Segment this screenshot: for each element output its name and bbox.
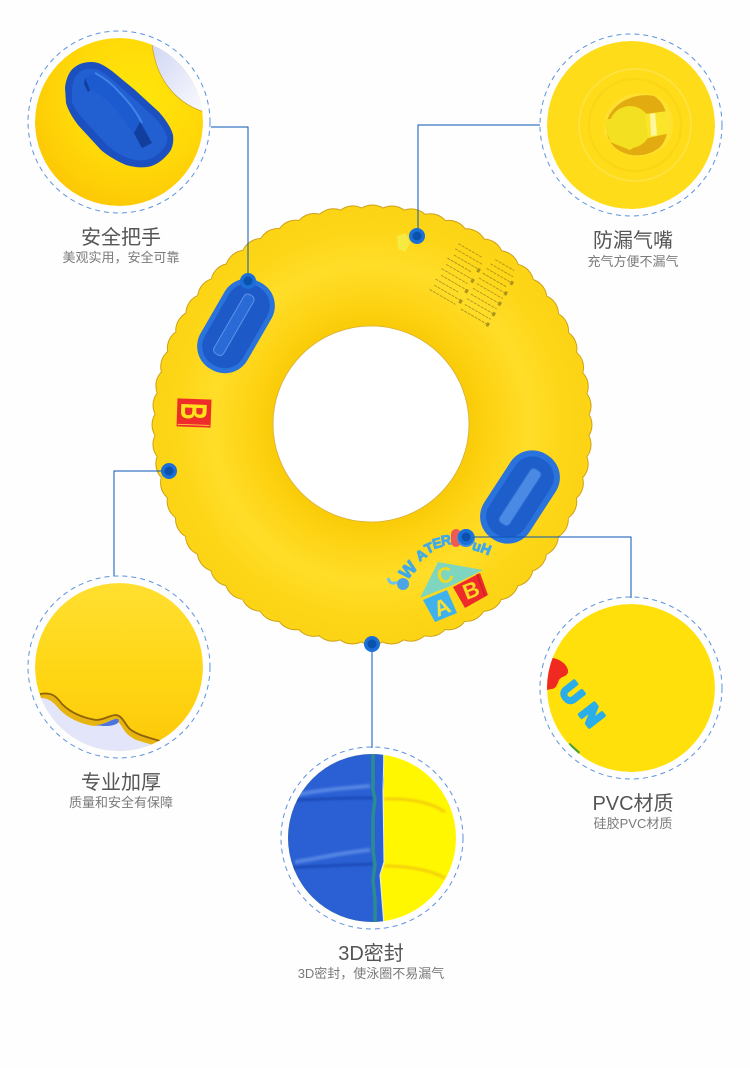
water brand wordmark: R (440, 531, 452, 549)
marker dot: handle (240, 273, 256, 289)
water brand wordmark (388, 529, 494, 590)
photo: PVC surface close-up: N (574, 698, 609, 732)
photo: blue handle close-up (35, 38, 203, 206)
photo: PVC surface close-up: U (554, 676, 589, 710)
dashed ring: thick edge (28, 576, 210, 758)
callout: PVC material (458, 529, 722, 831)
heading: valve: 防漏气嘴 (593, 229, 673, 252)
water brand wordmark: H (478, 540, 494, 558)
heading: PVC: PVC材质 (592, 792, 674, 815)
marker dot: valve (409, 228, 425, 244)
connector line: thick edge (114, 471, 169, 576)
right handle on ring (470, 440, 570, 554)
warning label printed on ring (430, 243, 518, 326)
photo: seam close-up (285, 750, 460, 926)
left handle on ring (188, 269, 284, 383)
description: PVC: 硅胶PVC材质 (594, 816, 672, 831)
description: seal: 3D密封，使泳圈不易漏气 (298, 966, 444, 981)
connector line: PVC (466, 537, 631, 598)
callout: thickened material (28, 463, 210, 810)
water brand wordmark: A (412, 545, 430, 564)
photo: ring edge close-up (30, 583, 203, 760)
marker dot: thick edge (161, 463, 177, 479)
water brand wordmark: u (470, 537, 484, 555)
swim ring product (156, 209, 588, 641)
dashed ring: PVC (540, 597, 722, 779)
callout: anti-leak valve (409, 34, 722, 269)
connector line: seal (371, 644, 373, 748)
toy house graphic: B (459, 576, 483, 605)
heading: handle: 安全把手 (81, 226, 161, 249)
red B logo (172, 398, 215, 428)
marker dot: seal (364, 636, 380, 652)
callout: safety handle (28, 30, 256, 289)
water brand wordmark: W (395, 557, 421, 583)
heading: thick edge: 专业加厚 (81, 771, 161, 794)
toy house graphic: A (430, 593, 454, 622)
toy house graphic (420, 561, 488, 622)
dashed ring: valve (540, 34, 722, 216)
dashed ring: handle (28, 31, 210, 213)
callout: 3D seal (281, 636, 463, 981)
toy house graphic: C (433, 561, 457, 590)
heading: seal: 3D密封 (338, 942, 404, 965)
description: thick edge: 质量和安全有保障 (69, 795, 173, 810)
connector line: handle (211, 127, 248, 281)
photo: valve close-up (547, 41, 715, 209)
marker dot: PVC (458, 529, 474, 545)
connector line: valve (418, 125, 540, 236)
water brand wordmark: T (422, 539, 437, 557)
red B logo: B (172, 402, 215, 421)
photo: PVC surface close-up (543, 604, 715, 772)
description: handle: 美观实用，安全可靠 (62, 250, 180, 265)
dashed ring: seal (281, 747, 463, 929)
description: valve: 充气方便不漏气 (587, 254, 679, 269)
water brand wordmark: E (430, 534, 444, 552)
inflation valve on ring (397, 233, 410, 252)
